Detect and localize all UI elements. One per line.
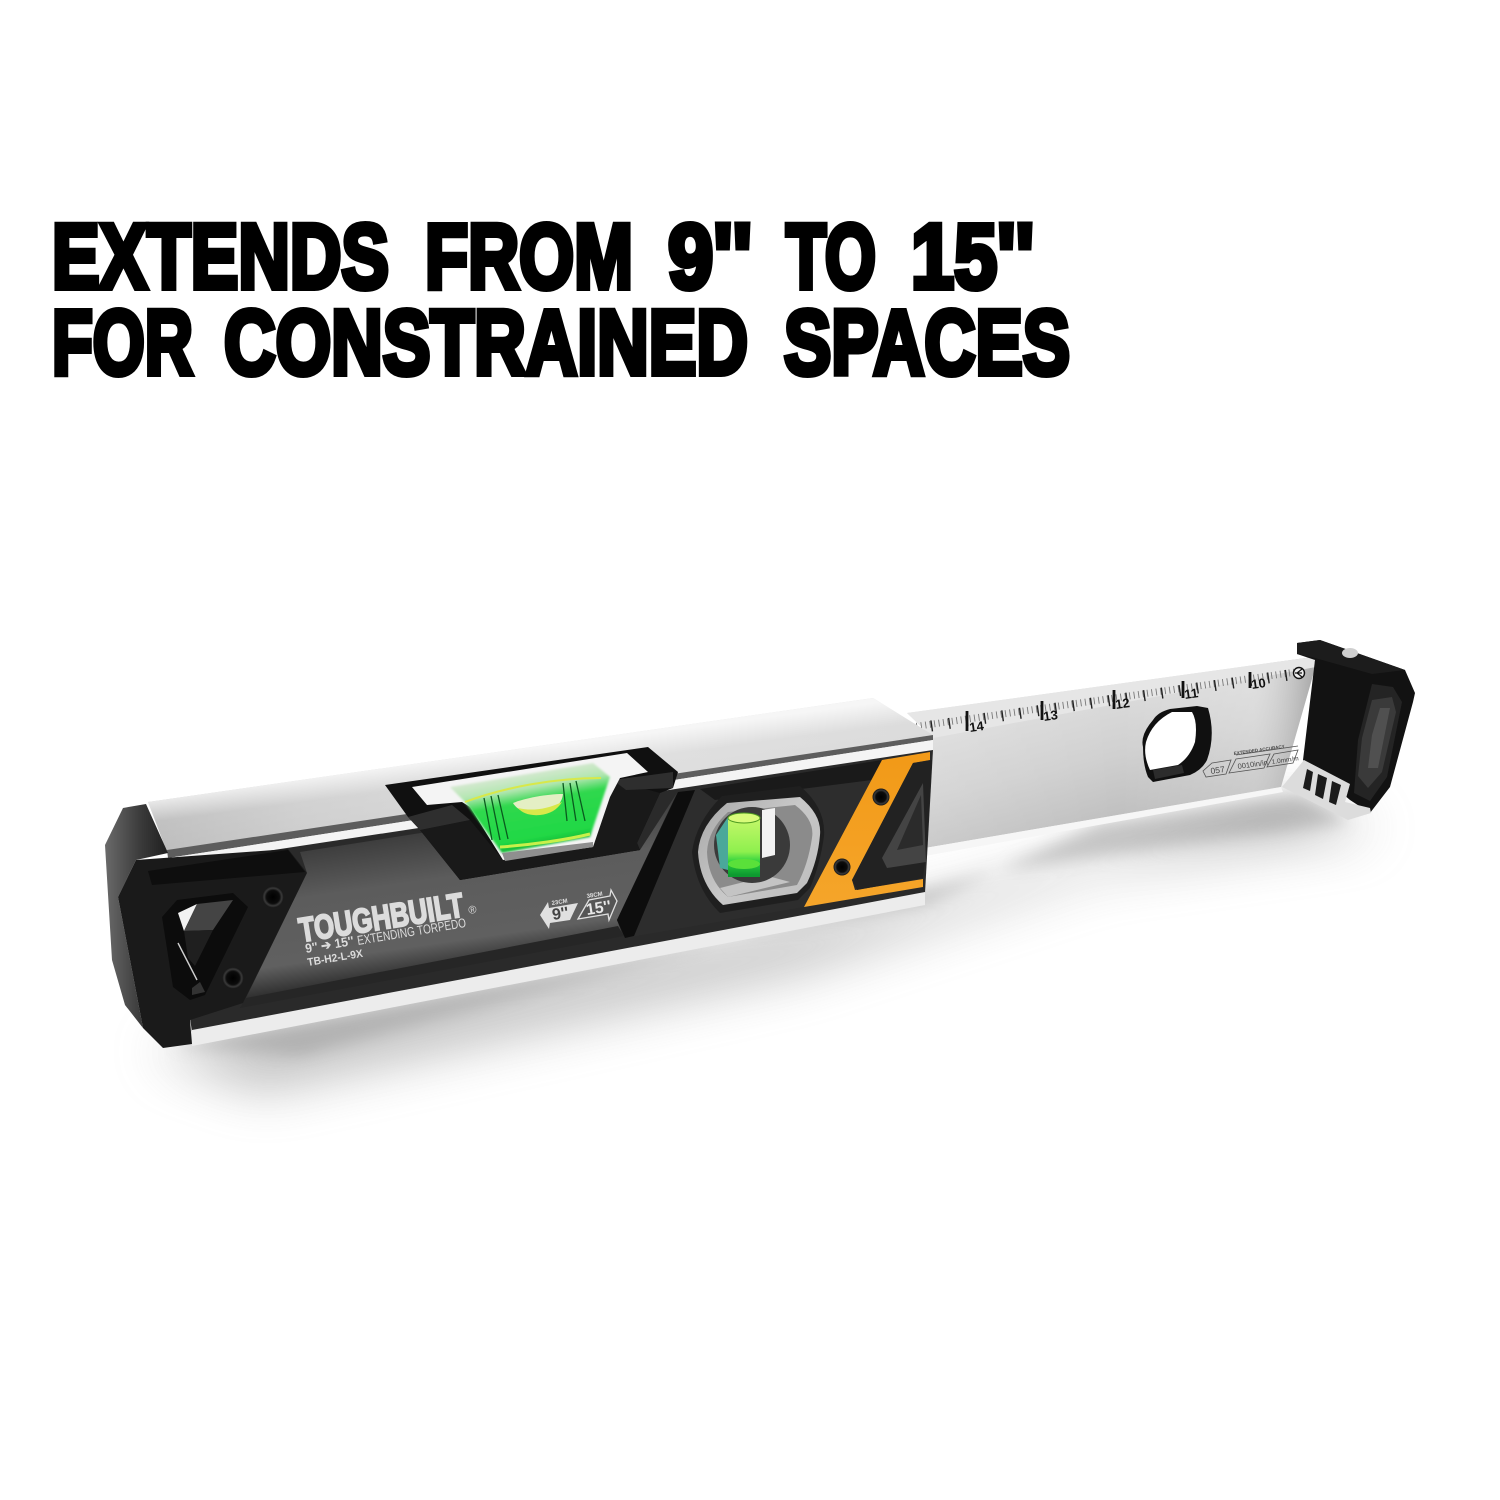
bubble xyxy=(513,794,563,813)
housing face xyxy=(420,780,660,880)
cap screw xyxy=(1342,648,1358,658)
housing xyxy=(692,786,824,913)
foot slots xyxy=(1303,769,1341,805)
accuracy label: 1.0mm/m xyxy=(1271,755,1299,766)
vial lines xyxy=(484,781,585,840)
size arrows badge: 23CM xyxy=(551,899,568,907)
panel dark stripes xyxy=(617,790,695,938)
cap inner recess xyxy=(1358,697,1396,788)
right section xyxy=(296,752,932,969)
title: TO xyxy=(786,206,876,308)
window xyxy=(412,753,648,860)
ruler numbers: 14 xyxy=(968,718,985,735)
accuracy label xyxy=(1203,744,1299,777)
pale side xyxy=(716,817,728,870)
right end cap xyxy=(1282,640,1415,820)
title: SPACES xyxy=(784,292,1070,394)
level logo text: EXTENDING TORPEDO xyxy=(356,915,467,948)
triangular window xyxy=(162,893,248,1000)
front face xyxy=(168,750,933,1032)
block shade xyxy=(882,783,926,868)
logo panel xyxy=(243,793,677,1004)
logo mark on ruler xyxy=(1294,668,1304,678)
accuracy label: 057 xyxy=(1210,764,1226,776)
title xyxy=(52,206,1070,394)
orange screws xyxy=(834,788,890,876)
ruler major ticks xyxy=(967,672,1250,731)
title: FOR xyxy=(52,292,193,394)
level logo text: TOUGHBUILT xyxy=(296,886,466,950)
ruler numbers: 12 xyxy=(1114,695,1131,712)
ruler strip xyxy=(907,657,1316,738)
horizontal vial housing xyxy=(385,747,678,880)
cap inner face xyxy=(1354,684,1402,801)
left cap front xyxy=(118,849,307,1048)
blade body xyxy=(907,657,1316,848)
ruler numbers: 13 xyxy=(1042,707,1059,724)
size arrows badge: 9'' xyxy=(551,905,570,924)
level logo text: 9'' ➔ 15'' xyxy=(304,933,355,956)
blade lower highlight xyxy=(925,787,1283,856)
right dark block xyxy=(852,760,932,890)
top face xyxy=(148,698,933,852)
vertical vial window xyxy=(692,786,824,913)
accuracy label: EXTENDED ACCURACY xyxy=(1233,744,1285,756)
level body xyxy=(105,698,933,1048)
orange band xyxy=(804,752,930,907)
accuracy label: 0010in/in xyxy=(1237,758,1268,771)
title: 9'' xyxy=(668,206,752,308)
bottom white strip xyxy=(192,892,925,1046)
size arrows badge: 38CM xyxy=(586,892,603,900)
black panel xyxy=(617,760,882,938)
cap top xyxy=(1297,640,1405,674)
ruler numbers: 11 xyxy=(1183,685,1199,702)
ruler medium ticks xyxy=(931,674,1296,726)
green vial xyxy=(728,817,760,877)
vial rim xyxy=(465,778,601,802)
ruler numbers xyxy=(968,675,1267,735)
title: CONSTRAINED xyxy=(224,292,748,394)
green vial xyxy=(450,763,610,853)
level logo text: ® xyxy=(468,904,477,917)
size arrows badge: 15'' xyxy=(585,898,612,919)
size arrows badge xyxy=(540,890,617,929)
level logo text: TB-H2-L-9X xyxy=(307,948,364,969)
silver foot xyxy=(1282,760,1371,820)
panel lower shade xyxy=(240,926,624,1008)
inner recess xyxy=(707,805,812,897)
ruler minor ticks xyxy=(912,672,1296,727)
dark circle xyxy=(714,807,790,883)
silver ring xyxy=(698,797,820,905)
title: EXTENDS xyxy=(52,206,389,308)
top white strip xyxy=(168,740,933,868)
left cap upper sheen xyxy=(148,850,305,885)
ruler numbers: 10 xyxy=(1250,675,1267,692)
title: 15'' xyxy=(911,206,1034,308)
left cap side xyxy=(105,804,168,1028)
level logo text xyxy=(296,886,477,969)
cap outer shell xyxy=(1297,640,1415,813)
title: FROM xyxy=(425,206,633,308)
top grey strip xyxy=(167,735,933,858)
ground shadow xyxy=(150,795,1380,1090)
sight hole xyxy=(1142,706,1212,782)
screws xyxy=(222,819,700,989)
silver lip xyxy=(502,842,593,861)
extension blade with ruler xyxy=(907,657,1316,856)
housing frame xyxy=(385,747,678,880)
white strip xyxy=(762,808,775,858)
